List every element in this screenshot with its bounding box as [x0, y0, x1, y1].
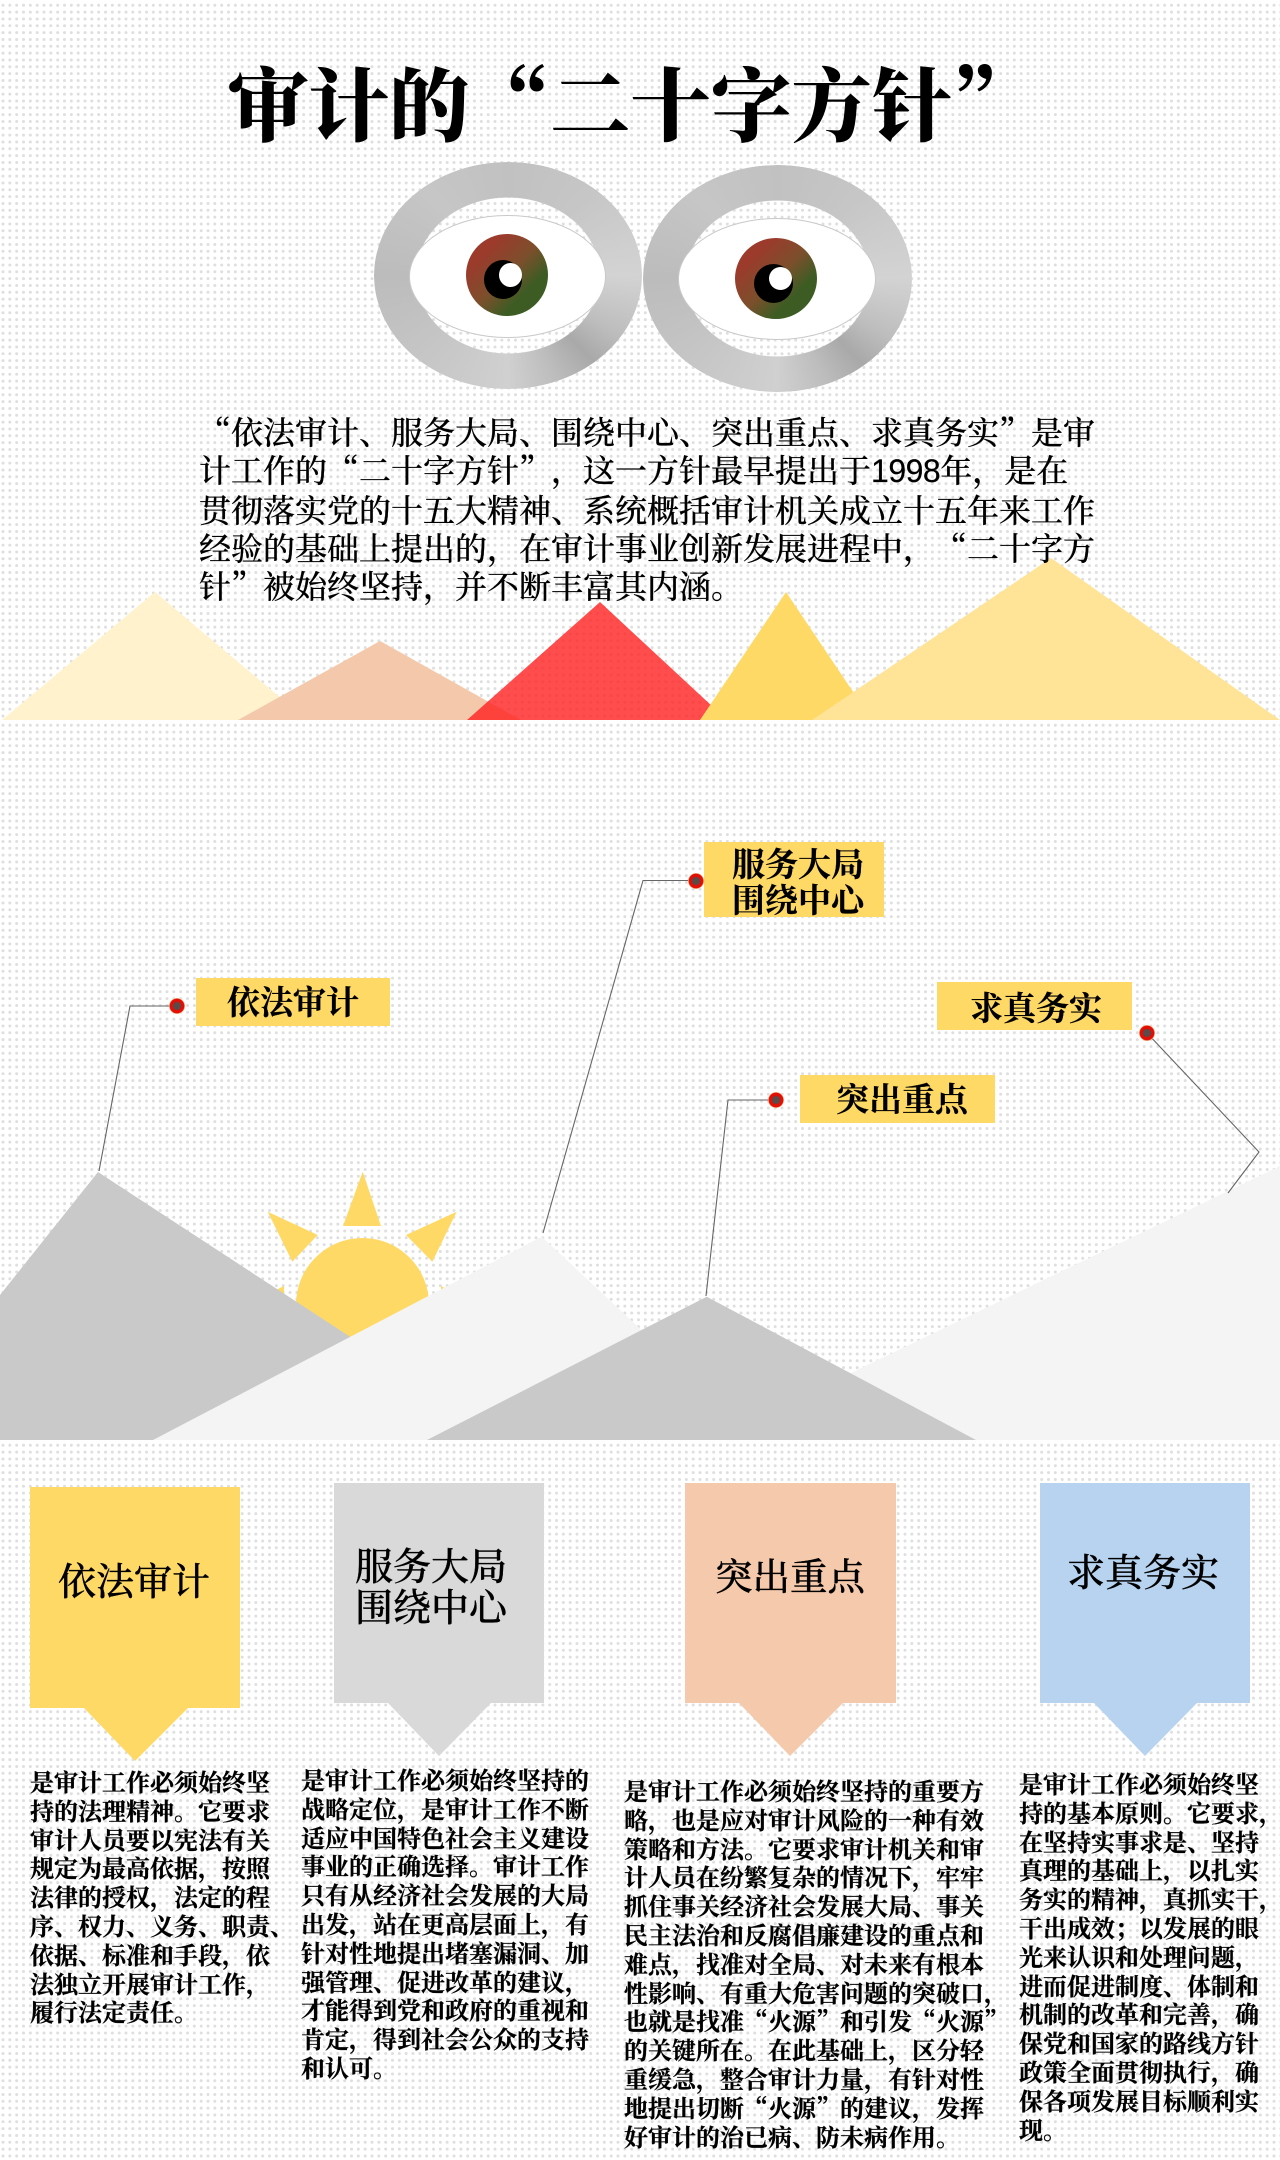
text block: 求真务实 description: 是审计工作必须始终坚 [1019, 1765, 1259, 1800]
card: 突出重点 [685, 1483, 896, 1756]
left highlight [499, 263, 522, 287]
text block: 服务大局围绕中心 description [301, 1761, 589, 2084]
text block: 突出重点 description: 略，也是应对审计风险的一种有效 [624, 1801, 984, 1836]
label: 求真务实 [937, 982, 1132, 1030]
text block: 突出重点 description: 也就是找准“火源”和引发“火源” [624, 2002, 1008, 2037]
text block: 依法审计 description: 序、权力、义务、职责、 [30, 1907, 294, 1942]
right pupil [754, 264, 793, 303]
text block: introduction: 针”被始终坚持，并不断丰富其内涵。 [199, 562, 743, 608]
card: 依法审计 [30, 1487, 240, 1761]
text block: 求真务实 description: 保各项发展目标顺利实 [1019, 2082, 1259, 2117]
label: 求真务实: 求真务实 [970, 982, 1102, 1030]
text block: 突出重点 description: 地提出切断“火源”的建议，发挥 [624, 2089, 984, 2124]
icon: left eye [374, 162, 642, 389]
text block: introduction: 计工作的“二十字方针”，这一方针最早提出于1998年，是在 [199, 446, 1068, 492]
text block: 服务大局围绕中心 description: 强管理、促进改革的建议， [301, 1963, 589, 1998]
label: 突出重点 [800, 1075, 995, 1123]
text block: 求真务实 description: 在坚持实事求是、坚持 [1019, 1823, 1259, 1858]
card shape [334, 1483, 544, 1756]
text block: 服务大局围绕中心 description: 和认可。 [301, 2049, 397, 2084]
text block: 突出重点 description: 策略和方法。它要求审计机关和审 [624, 1830, 984, 1865]
card title: 依法审计 [58, 1551, 210, 1606]
text block: 求真务实 description: 政策全面贯彻执行，确 [1019, 2053, 1259, 2088]
text block: 依法审计 description: 持的法理精神。它要求 [30, 1792, 270, 1827]
text block: 突出重点 description: 重缓急，整合审计力量，有针对性 [624, 2060, 984, 2095]
label: 突出重点: 突出重点 [836, 1074, 968, 1121]
right highlight [769, 267, 792, 290]
label: 服务大局围绕中心 [704, 842, 884, 917]
title: 审计的“二十字方针” [228, 43, 1033, 159]
left eye ring [374, 162, 642, 389]
text block: 依法审计 description: 审计人员要以宪法有关 [30, 1821, 270, 1856]
text block: 依法审计 description: 法律的授权，法定的程 [30, 1878, 270, 1913]
text block: 服务大局围绕中心 description: 才能得到党和政府的重视和 [301, 1991, 589, 2026]
card shape [1040, 1483, 1250, 1756]
text block: 依法审计 description: 规定为最高依据，按照 [30, 1849, 270, 1884]
light mountain right [712, 1166, 1280, 1440]
text block: introduction: “依法审计、服务大局、围绕中心、突出重点、求真务实”是审 [199, 408, 1095, 454]
card title [355, 1536, 507, 1632]
label: 服务大局围绕中心: 围绕中心 [732, 875, 864, 922]
text block: 求真务实 description: 真理的基础上，以扎实 [1019, 1851, 1259, 1886]
card: 求真务实 [1040, 1483, 1250, 1756]
text block: 突出重点 description: 的关键所在。在此基础上，区分轻 [624, 2031, 984, 2066]
grey mountain left [0, 1172, 508, 1440]
text block: 求真务实 description [1019, 1765, 1280, 2146]
right eye ring [643, 165, 912, 392]
card title: 突出重点 [715, 1547, 865, 1601]
text block: 突出重点 description: 抓住事关经济社会发展大局、事关 [624, 1887, 984, 1922]
text block: 服务大局围绕中心 description: 出发，站在更高层面上，有 [301, 1905, 589, 1940]
card title: 服务大局 [355, 1536, 507, 1591]
text block: 服务大局围绕中心 description: 适应中国特色社会主义建设 [301, 1819, 589, 1854]
text block: 服务大局围绕中心 description: 事业的正确选择。审计工作 [301, 1847, 589, 1882]
text block: 突出重点 description: 性影响、有重大危害问题的突破口， [624, 1974, 1008, 2009]
text block: 求真务实 description: 干出成效；以发展的眼 [1019, 1909, 1259, 1944]
text block: 求真务实 description: 持的基本原则。它要求， [1019, 1794, 1280, 1829]
left iris [466, 234, 548, 316]
card: 服务大局围绕中心 [334, 1483, 544, 1756]
marker: 服务大局 [688, 873, 704, 889]
text block: 突出重点 description [624, 1772, 1008, 2153]
text block: 依法审计 description: 履行法定责任。 [30, 1993, 198, 2028]
text block: 求真务实 description: 机制的改革和完善，确 [1019, 1995, 1259, 2030]
marker: 突出重点 [768, 1092, 784, 1108]
text block: 服务大局围绕中心 description: 肯定，得到社会公众的支持 [301, 2020, 589, 2055]
text block: 突出重点 description: 计人员在纷繁复杂的情况下，牢牢 [624, 1858, 984, 1893]
card shape [685, 1483, 896, 1756]
text block: 依法审计 description: 依据、标准和手段，依 [30, 1936, 270, 1971]
text block: 依法审计 description: 是审计工作必须始终坚 [30, 1763, 270, 1798]
grey mountain middle [427, 1297, 976, 1440]
light mountain middle [153, 1237, 760, 1440]
text block: 服务大局围绕中心 description: 针对性地提出堵塞漏洞、加 [301, 1934, 589, 1969]
text block: 突出重点 description: 民主法治和反腐倡廉建设的重点和 [624, 1916, 984, 1951]
text block: 突出重点 description: 好审计的治已病、防未病作用。 [624, 2118, 960, 2153]
card shape [30, 1487, 240, 1761]
text block: 突出重点 description: 难点，找准对全局、对未来有根本 [624, 1945, 984, 1980]
text block: 依法审计 description: 法独立开展审计工作， [30, 1965, 270, 2000]
left eye white [410, 216, 605, 337]
text block: 求真务实 description: 务实的精神，真抓实干， [1019, 1880, 1280, 1915]
right iris [735, 238, 817, 319]
icon: sun [268, 1172, 457, 1371]
chart: colored mountains [2, 558, 1280, 720]
text block: introduction: 贯彻落实党的十五大精神、系统概括审计机关成立十五年来工作 [199, 486, 1095, 532]
text block: 依法审计 description [30, 1763, 294, 2028]
text block: 服务大局围绕中心 description: 是审计工作必须始终坚持的 [301, 1761, 589, 1796]
chart: grey mountains and sun [0, 880, 1280, 1440]
marker: 依法审计 [169, 998, 185, 1014]
card title: 求真务实 [1067, 1542, 1219, 1597]
label: 依法审计: 依法审计 [227, 976, 359, 1024]
text block: 求真务实 description: 保党和国家的路线方针 [1019, 2024, 1259, 2059]
text block: introduction: 经验的基础上提出的，在审计事业创新发展进程中，“二十字方 [199, 524, 1095, 570]
icon: right eye [643, 165, 912, 392]
text block: 求真务实 description: 进而促进制度、体制和 [1019, 1967, 1259, 2002]
text block: 突出重点 description: 是审计工作必须始终坚持的重要方 [624, 1772, 984, 1807]
text block: introduction [199, 408, 1095, 608]
card title: 围绕中心 [355, 1577, 507, 1632]
text block: 服务大局围绕中心 description: 战略定位，是审计工作不断 [301, 1790, 589, 1825]
right eye white [679, 219, 875, 339]
label: 服务大局围绕中心: 服务大局 [732, 839, 864, 886]
text block: 服务大局围绕中心 description: 只有从经济社会发展的大局 [301, 1876, 589, 1911]
text block: 求真务实 description: 现。 [1019, 2111, 1067, 2146]
marker: 求真务实 [1139, 1025, 1155, 1041]
connector lines [99, 880, 1259, 1296]
text block: 求真务实 description: 光来认识和处理问题， [1019, 1938, 1259, 1973]
left pupil [484, 260, 522, 299]
label: 依法审计 [196, 978, 390, 1026]
